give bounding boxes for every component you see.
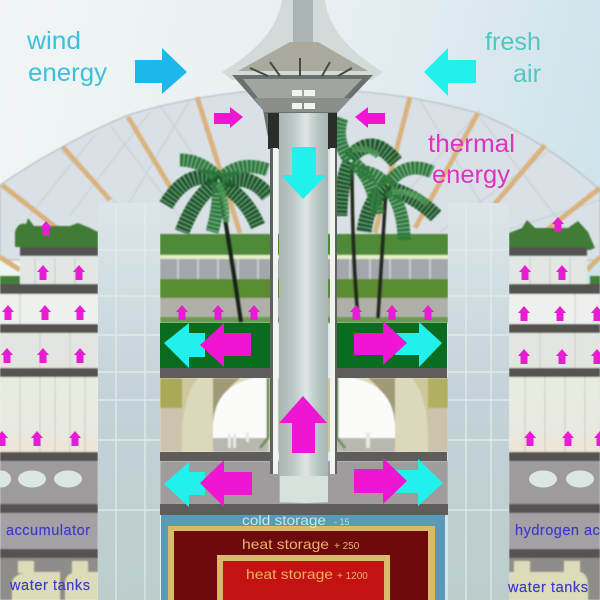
- water tanks, right: [509, 561, 588, 600]
- label: thermal energy: [428, 130, 515, 189]
- central tower top: [222, 0, 383, 149]
- dome ribs: [0, 97, 600, 270]
- left apartment block: [0, 218, 98, 600]
- green bands in the central floors: [160, 323, 447, 368]
- arrow: fresh air: [424, 48, 476, 96]
- small thermal arrows: [0, 217, 600, 446]
- rooftop greenery: [509, 220, 595, 250]
- right glass column: [448, 203, 509, 600]
- right apartment block: [509, 220, 600, 600]
- cold storage layer: [161, 515, 445, 600]
- label: thermal energy: thermal: [428, 130, 515, 158]
- storage labels: + 250: [334, 541, 360, 552]
- storage labels: heat storage: [242, 536, 329, 552]
- label: thermal energy: energy: [432, 161, 510, 189]
- lantern structure: [232, 75, 373, 148]
- label: fresh air: air: [513, 60, 541, 88]
- storage vault: [161, 513, 445, 600]
- label: fresh air: fresh: [485, 28, 541, 56]
- arrow: thermal up shaft: [279, 396, 327, 453]
- storage labels: - 15: [334, 517, 350, 527]
- rooftop greenery: [15, 218, 98, 247]
- left glass column: [98, 203, 160, 600]
- glass dome: [0, 90, 600, 270]
- storage labels: heat storage: [246, 566, 333, 582]
- arrows: lower left pair: [164, 460, 252, 507]
- floor slabs, right: [509, 247, 600, 558]
- storage labels: + 1200: [337, 571, 368, 582]
- arrows: upper right pair: [354, 321, 442, 367]
- central ventilation shaft: [270, 113, 337, 503]
- arrow: fresh air down shaft: [281, 147, 327, 199]
- label: hydrogen accumulator left: accumulator: [6, 523, 90, 539]
- arrow: thermal inflow right: [355, 107, 385, 128]
- storage labels: cold storage: [242, 513, 326, 528]
- arrow: wind energy: [135, 48, 187, 94]
- label: water tanks right: water tanks: [507, 580, 588, 596]
- water tanks, left: [12, 561, 98, 600]
- oval openings: [0, 470, 594, 488]
- central floor slabs: [158, 368, 448, 515]
- central floors and arches: [160, 234, 448, 505]
- label: water tanks left: water tanks: [9, 578, 90, 594]
- arrows: lower right pair: [354, 458, 443, 506]
- floor slabs, left: [0, 247, 98, 558]
- outer heat storage layer: [174, 531, 428, 600]
- label: wind energy: energy: [28, 59, 108, 87]
- inner heat storage layer: [223, 561, 384, 600]
- label: fresh air: [485, 28, 541, 88]
- label: wind energy: wind: [26, 27, 81, 55]
- arrow: thermal inflow left: [214, 107, 243, 128]
- arch: right passage: [334, 378, 428, 452]
- arrows: upper left pair: [164, 323, 251, 368]
- roof spire: [222, 0, 383, 80]
- label: wind energy: [26, 27, 108, 87]
- palm trees: [166, 118, 436, 322]
- arch: left passage: [182, 378, 272, 452]
- storage labels: [242, 513, 368, 582]
